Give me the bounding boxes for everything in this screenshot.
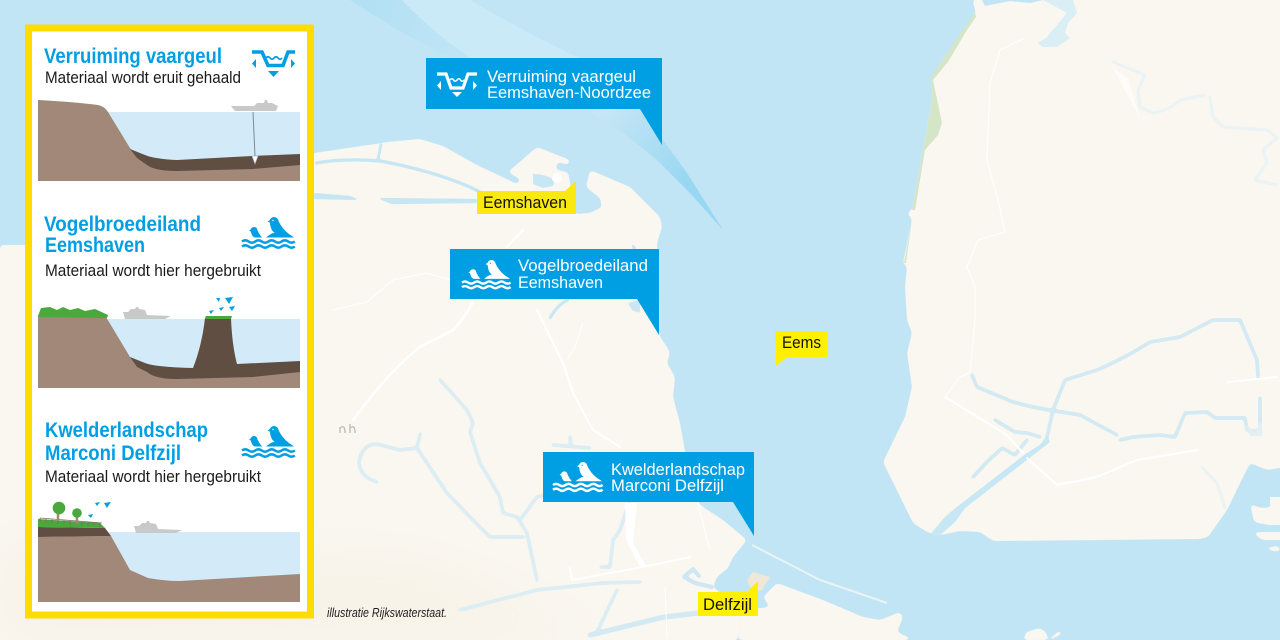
credit caption: illustratie Rijkswaterstaat. [327,606,447,620]
callout text: Kwelderlandschap [611,460,745,479]
subheading: Materiaal wordt hier hergebruikt [45,467,261,486]
map: east roads [945,39,1277,485]
cross-section diagram: dredging [38,100,300,181]
grey place marks [340,424,355,433]
panel frame [28,28,310,615]
callout: Vogelbroedeiland Eemshaven [450,249,659,335]
place label: Eems: Eems [782,333,821,352]
callout: Kwelderlandschap Marconi Delfzijl [543,452,754,536]
callout text: Vogelbroedeiland [518,256,648,275]
section: Verruiming vaargeul [38,45,300,181]
section: Vogelbroedeiland [38,213,300,388]
callout text line two: Marconi Delfzijl [611,476,724,495]
map: Delfzijl dike [752,545,887,603]
subheading: Materiaal wordt eruit gehaald [45,68,241,87]
heading line two: Marconi Delfzijl [45,442,181,465]
map: west waterways [314,144,742,635]
heading: Kwelderlandschap [45,419,208,442]
icon: birds on water [242,426,295,457]
callout text line two: Eemshaven [518,273,603,292]
place label: Eemshaven [477,181,576,214]
map: west roads [333,230,710,638]
map: west land [0,139,915,640]
icon: birds on water [553,462,603,491]
subheading: Materiaal wordt hier hergebruikt [45,261,261,280]
heading line two: Eemshaven [45,234,145,257]
place label: Delfzijl: Delfzijl [703,595,752,614]
cross-section diagram: salt marsh [38,502,300,602]
callout text: Verruiming vaargeul [487,67,636,86]
icon: birds on water [462,260,511,288]
icon: dredging channel [252,52,295,77]
callout: Verruiming vaargeul Eemshaven-Noordzee [426,58,662,145]
callout text line two: Eemshaven-Noordzee [487,83,651,102]
section: Kwelderlandschap [38,419,300,602]
place label: Eems [775,331,828,366]
map: east land [883,0,1280,640]
shipping channel streak [350,0,723,230]
heading: Vogelbroedeiland [44,213,201,236]
icon: dredging channel [437,74,477,97]
place label: Eemshaven: Eemshaven [483,193,567,212]
icon: birds on water [242,217,295,248]
place label: Delfzijl [698,581,758,616]
panel: legend [28,28,828,620]
heading: Verruiming vaargeul [44,45,222,68]
cross-section diagram: bird island [38,297,300,388]
map: east waterways [930,62,1277,535]
